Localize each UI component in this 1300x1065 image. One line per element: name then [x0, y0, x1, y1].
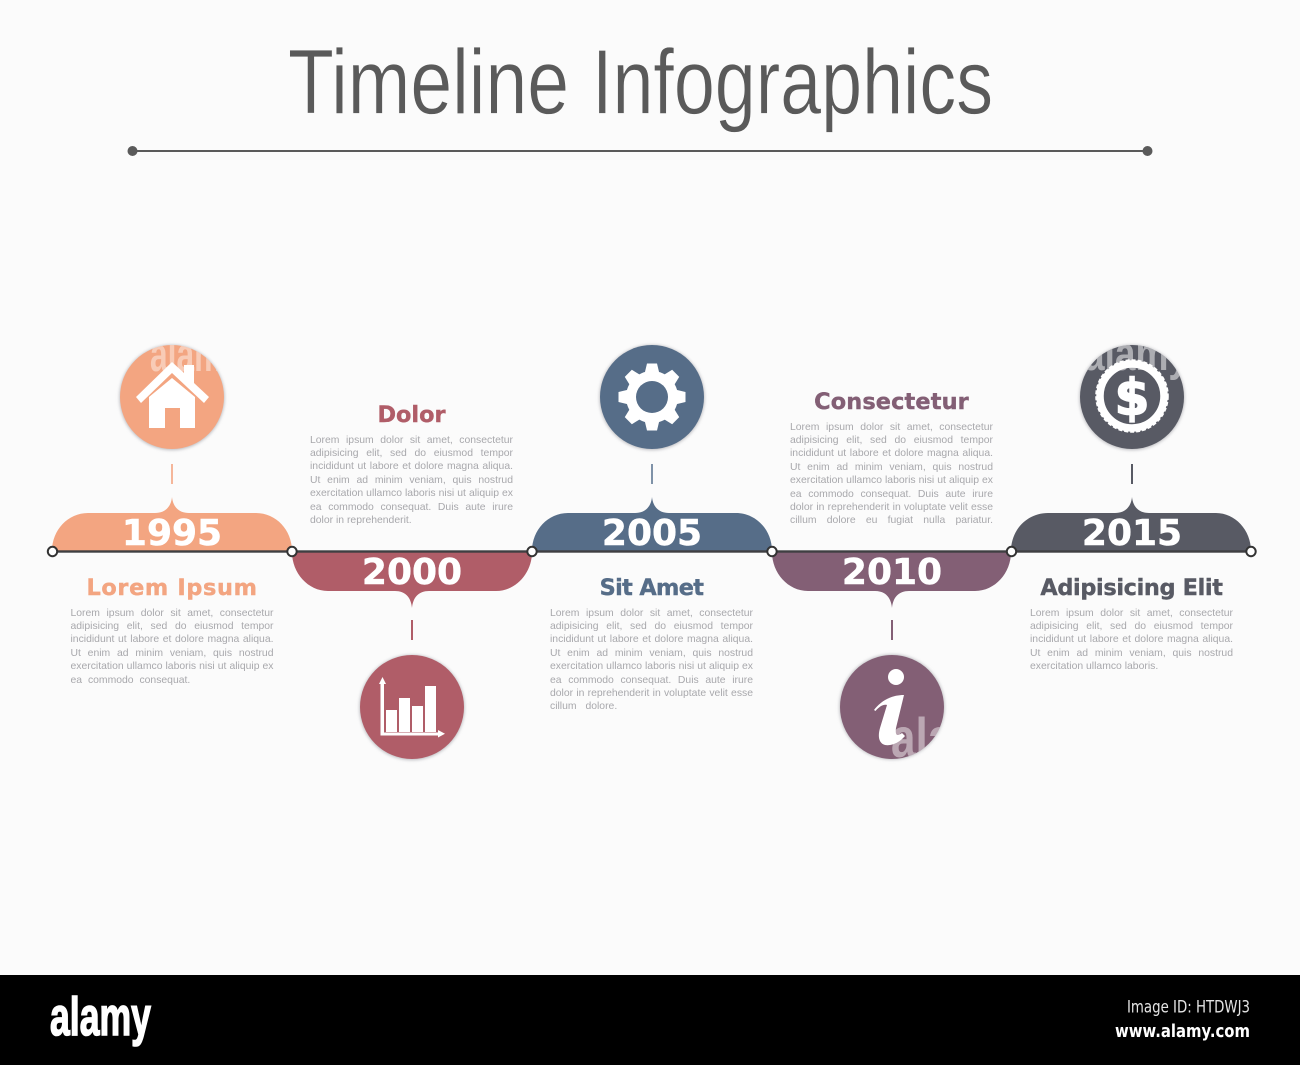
body text: adipisicing elit, sed do eiusmod tempor — [310, 448, 513, 459]
body text: Ut enim ad minim veniam, quis nostrud — [310, 475, 513, 486]
bracket 1995 — [52, 497, 292, 551]
text block: Adipisicing Elit — [1030, 574, 1233, 672]
text block: Lorem Ipsum — [70, 574, 274, 686]
icon: bar chart — [360, 655, 464, 760]
segment: 2005 — [532, 345, 772, 554]
body text — [1030, 608, 1233, 672]
segment: 2015 — [1011, 328, 1251, 554]
body text: ea commodo consequat. Duis aute irure — [790, 489, 993, 500]
title: Infographics — [592, 32, 993, 134]
year 2005: 2005 — [602, 513, 702, 554]
body text — [310, 434, 513, 526]
body text: incididunt ut labore et dolore magna aliqua. — [70, 634, 274, 645]
body text: ea commodo consequat. Duis aute irure — [550, 675, 753, 686]
icon: dollar coin: $ — [1115, 368, 1149, 426]
body text: exercitation ullamco laboris nisi ut aliquip ex — [790, 475, 993, 486]
heading: Consectetur: Consectetur — [814, 388, 969, 414]
bracket 2010 — [772, 552, 1011, 608]
body text: adipisicing elit, sed do eiusmod tempor — [550, 621, 753, 632]
year 2010: 2010 — [842, 552, 942, 593]
body text: dolor in reprehenderit in voluptate velit esse — [790, 502, 993, 513]
body text: ea commodo consequat. — [70, 675, 190, 686]
segment: 2000 — [292, 552, 532, 760]
footer band — [0, 975, 1300, 1065]
heading: Sit Amet: Sit Amet — [600, 574, 703, 600]
heading: Dolor: Dolor — [377, 402, 446, 428]
connector tick 2015 — [1131, 464, 1133, 484]
icon: house — [118, 343, 226, 452]
connector tick 2010 — [891, 620, 893, 640]
body text: exercitation ullamco laboris nisi ut aliquip ex — [70, 661, 274, 672]
body text: Lorem ipsum dolor sit amet, consectetur — [790, 422, 993, 432]
text block: Sit Amet — [550, 574, 753, 712]
body text — [70, 608, 274, 686]
segment: 2010 — [772, 552, 1016, 769]
body text: cillum dolore. — [550, 701, 617, 712]
body text: incididunt ut labore et dolore magna aliqua. — [1030, 634, 1233, 645]
segment: 1995 — [52, 329, 292, 554]
bracket 2015 — [1011, 497, 1251, 551]
connector tick 1995 — [171, 464, 173, 484]
website: www.alamy.com — [1115, 1021, 1250, 1042]
body text — [550, 608, 753, 712]
body text: incididunt ut labore et dolore magna aliqua. — [550, 634, 753, 645]
body text: adipisicing elit, sed do eiusmod tempor — [70, 621, 274, 632]
body text: incididunt ut labore et dolore magna aliqua. — [310, 461, 513, 472]
text block: Consectetur — [790, 388, 993, 526]
icon: gear — [600, 345, 704, 450]
body text: exercitation ullamco laboris. — [1030, 661, 1158, 672]
body text: Lorem ipsum dolor sit amet, consectetur — [310, 434, 513, 446]
connector tick 2000 — [411, 620, 413, 640]
icon: info: alamy — [891, 706, 1016, 769]
timeline axis — [48, 547, 1256, 556]
body text — [790, 422, 993, 526]
year 1995: 1995 — [122, 513, 222, 554]
body text: cillum dolore eu fugiat nulla pariatur. — [790, 515, 993, 526]
icon: dollar coin — [1078, 343, 1186, 452]
body text: Ut enim ad minim veniam, quis nostrud — [70, 648, 274, 659]
footer logo: alamy — [50, 987, 151, 1047]
body text: exercitation ullamco laboris nisi ut aliquip ex — [310, 488, 513, 499]
text block: Dolor — [310, 402, 513, 526]
body text: ea commodo consequat. Duis aute irure — [310, 502, 513, 513]
body text: dolor in reprehenderit in voluptate velit esse — [550, 688, 753, 699]
title — [288, 32, 993, 134]
title rule — [128, 146, 1152, 156]
body text: adipisicing elit, sed do eiusmod tempor — [1030, 621, 1233, 632]
heading: Lorem Ipsum: Lorem Ipsum — [86, 574, 258, 600]
image id: Image ID: HTDWJ3 — [1127, 998, 1250, 1018]
bracket 2005 — [532, 497, 772, 551]
body text: adipisicing elit, sed do eiusmod tempor — [790, 435, 993, 446]
icon: info — [838, 652, 946, 762]
body text: Ut enim ad minim veniam, quis nostrud — [550, 648, 753, 659]
title: Timeline — [288, 32, 569, 134]
body text: incididunt ut labore et dolore magna aliqua. — [790, 448, 993, 459]
year 2015: 2015 — [1082, 513, 1182, 554]
icon: dollar coin: alamy — [1084, 328, 1189, 381]
heading: Adipisicing Elit: Adipisicing Elit — [1040, 574, 1223, 600]
body text: Ut enim ad minim veniam, quis nostrud — [1030, 648, 1233, 659]
body text: Ut enim ad minim veniam, quis nostrud — [790, 462, 993, 473]
body text: Lorem ipsum dolor sit amet, consectetur — [1030, 608, 1233, 618]
body text: Lorem ipsum dolor sit amet, consectetur — [550, 608, 753, 618]
body text: dolor in reprehenderit. — [310, 515, 412, 526]
body text: exercitation ullamco laboris nisi ut aliquip ex — [550, 661, 753, 672]
bracket 2000 — [292, 552, 532, 608]
icon: house: alamy — [150, 329, 240, 382]
connector tick 2005 — [651, 464, 653, 484]
year 2000: 2000 — [362, 552, 462, 593]
body text: Lorem ipsum dolor sit amet, consectetur — [70, 608, 274, 618]
